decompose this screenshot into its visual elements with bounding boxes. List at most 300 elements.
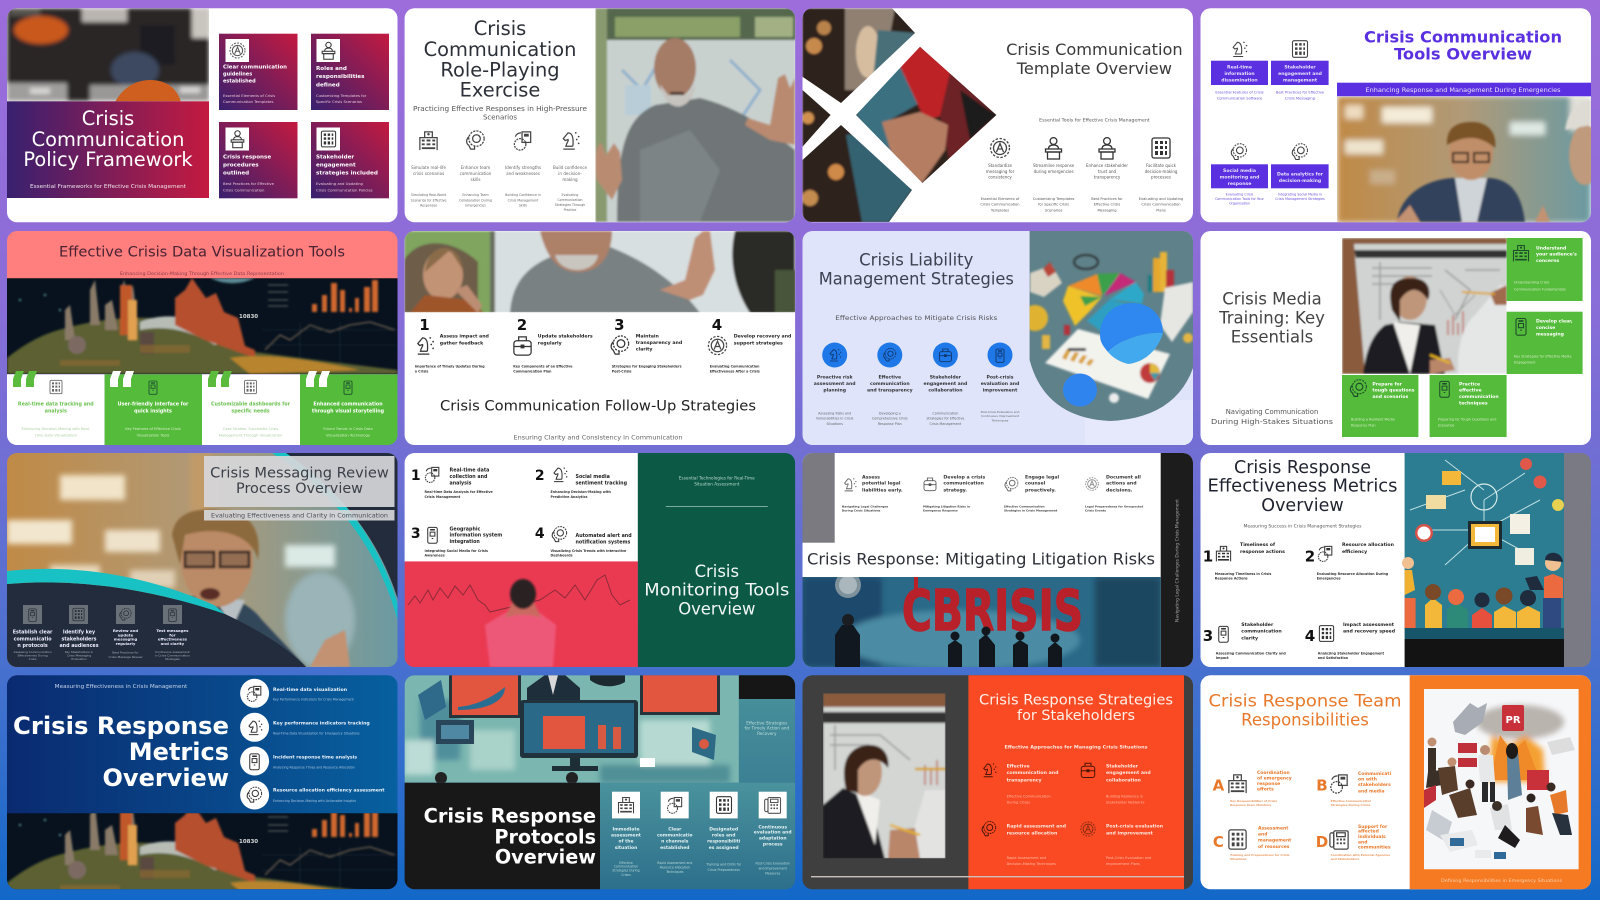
item 2: Enhancing Team <box>462 193 489 197</box>
column: real-time data tracking <box>7 371 105 445</box>
protocol 2: Techniques <box>665 870 684 874</box>
tool 2 <box>535 467 628 499</box>
tool 1: Real-time Data Analysis for Effective <box>424 490 493 494</box>
step 2 <box>513 316 593 374</box>
strategy 4: Post-Crisis Evaluation and <box>981 410 1020 414</box>
tool 4 <box>535 526 632 558</box>
metric 1: Timeliness of <box>1240 542 1276 548</box>
action 1: potential legal <box>862 481 901 487</box>
card: Prepare for tough questions: Building a Resilient Media <box>1351 417 1395 421</box>
column: user-friendly interface: User-friendly interface for <box>118 401 189 407</box>
strategy 1 <box>814 342 856 426</box>
item 1: Simulating Real-World <box>411 193 446 197</box>
step 2: regularly <box>538 340 562 346</box>
item 4: in decision- <box>558 171 582 176</box>
action 4: actions and <box>1106 481 1137 487</box>
tool: Social media monitoring and response: monitoring and <box>1220 175 1259 181</box>
column: enhanced communication: Future Trends in Crisis Data <box>323 427 373 431</box>
item 2: communication <box>460 171 492 176</box>
action 1: Assess <box>862 475 880 481</box>
column: user-friendly interface <box>105 371 202 445</box>
action 1 <box>842 475 903 512</box>
panel: Crisis Communication Role-Playing Exercise <box>404 8 796 223</box>
tool 2: 2 <box>535 468 545 484</box>
heading: Crisis Media <box>1222 289 1322 308</box>
step: review messaging: regularly <box>116 641 136 646</box>
heading box <box>204 456 394 507</box>
responsibility B: Communicati <box>1358 771 1392 777</box>
action 1: During Crisis Situations <box>842 508 881 512</box>
item 2: Streamline response <box>1033 163 1075 168</box>
protocol 2: Resource Allocation <box>660 865 690 869</box>
tool: Real-time information dissemination: dissemination <box>1221 78 1258 84</box>
item 2 <box>459 131 492 208</box>
card: Practice effective communication: techniques <box>1459 400 1488 406</box>
panel: Effective Crisis Data Visualization Tools <box>7 231 398 445</box>
column: customizable dashboards: Case Studies: Successful Crisis <box>223 427 278 431</box>
strategy 3: collaboration <box>928 387 962 393</box>
card: Understand your audience <box>1507 238 1583 301</box>
subtitle box <box>204 510 394 520</box>
step 4: Effectiveness After a Crisis <box>710 370 760 374</box>
step: identify stakeholders: and audiences <box>59 643 99 649</box>
PR sign: PR <box>1505 715 1521 726</box>
protocol 3: es assigned <box>709 845 739 851</box>
heading <box>1007 43 1182 78</box>
responsibility D: Support for <box>1358 824 1388 830</box>
tool: Real-time information dissemination <box>1211 42 1268 100</box>
column: real-time data tracking: Time Data Visualization <box>34 434 77 438</box>
heading <box>1208 692 1402 730</box>
card: Stakeholder engagement strategies: Stakeholder <box>316 154 354 160</box>
panel: Crisis Response Metrics Overview <box>7 675 398 899</box>
step 1: gather feedback <box>440 340 484 346</box>
tool 2: sentiment tracking <box>576 480 628 486</box>
action 4: Legal Preparedness for Unexpected <box>1085 504 1143 508</box>
action 3: Effective Communication <box>1004 504 1045 508</box>
strategy 2: Developing a <box>879 411 901 415</box>
decorative blue lens <box>1100 303 1163 352</box>
responsibility B: and media <box>1358 788 1385 794</box>
tool 4: notification systems <box>576 540 630 546</box>
step: review messaging: Review and <box>113 628 138 633</box>
step: communication protocols: communicatio <box>14 636 52 642</box>
strategy 2: Response Plan <box>878 422 902 426</box>
metric 3: 3 <box>1203 627 1213 645</box>
strategy 3: Strategies for Effective <box>926 416 964 420</box>
item 3: Skills <box>519 204 527 208</box>
tool 3: Integrating Social Media for Crisis <box>424 549 488 553</box>
item 4: Build confidence <box>553 165 587 170</box>
card: Roles and responsibilities: Customizing Templates for <box>316 93 367 98</box>
metric 2 <box>1305 542 1394 581</box>
action 3: Engage legal <box>1025 475 1060 481</box>
subtitle: Practicing Effective Responses in High-Pressure <box>413 105 587 113</box>
tool 4: Visualizing Crisis Trends with Interactive <box>550 549 627 553</box>
protocol 3: Crisis Preparedness <box>708 868 740 872</box>
heading: Exercise <box>460 79 540 102</box>
tool 1: analysis <box>450 480 472 486</box>
subtitle <box>1211 408 1334 426</box>
step 3: Strategies for Engaging Stakeholders <box>612 364 682 368</box>
strategy 3: engagement and <box>923 381 967 387</box>
tool: Social media monitoring and response: Social media <box>1223 168 1256 174</box>
protocol cards <box>600 783 796 890</box>
item 3 <box>1086 138 1128 212</box>
item 1: Crisis Communication <box>980 203 1020 207</box>
column: real-time data tracking: Real-time data tracking and <box>18 401 94 407</box>
tool 2: Social media <box>576 474 610 480</box>
card: Clear communication guidelines: established <box>223 78 256 84</box>
action 2: Emergency Response <box>923 508 958 512</box>
protocol 3: Training and Drills for <box>705 862 742 866</box>
strategy 2: Stakeholder <box>1106 764 1139 770</box>
card: Crisis response procedures: procedures <box>223 162 259 168</box>
heading: Essentials <box>1231 327 1313 346</box>
responsibility D <box>1316 824 1391 861</box>
item 2: Collaboration During <box>459 198 492 202</box>
card: Stakeholder engagement strategies: Crisis Communication Policies <box>316 188 373 192</box>
metric 4: and recovery speed <box>1343 629 1395 635</box>
side note: Recovery <box>757 731 777 736</box>
heading <box>979 692 1173 724</box>
card: Understand your audience: Understand <box>1536 245 1566 251</box>
item 4: Facilitate quick <box>1146 163 1177 168</box>
item 4: Practice <box>564 208 576 212</box>
metric 3: Assessing Communication Clarity and <box>1216 651 1286 655</box>
tool 2: Predictive Analytics <box>550 495 588 499</box>
metric 1: Response Actions <box>1215 577 1248 581</box>
item 1: Templates <box>990 208 1009 212</box>
step: communication protocols: Effectiveness During <box>18 654 48 658</box>
image: data terrain <box>7 803 398 899</box>
strategy 4: Post-crisis <box>987 375 1014 381</box>
step 4 <box>708 316 791 374</box>
metric row 1 <box>240 679 355 708</box>
metric 1 <box>1203 542 1285 581</box>
card: Crisis response procedures: Crisis response <box>223 154 271 160</box>
step: identify stakeholders: Crisis Messaging <box>67 654 91 658</box>
subtitle: Ensuring Clarity and Consistency in Communication <box>514 435 683 441</box>
metric 1: 1 <box>1203 547 1213 565</box>
item 1: messaging for <box>986 169 1015 174</box>
heading: Crisis Communication <box>1006 40 1183 59</box>
PR sign <box>1502 705 1524 731</box>
metric 2: 2 <box>1305 547 1315 565</box>
tool 3: Awareness <box>424 554 445 558</box>
strategy 2 <box>867 342 913 426</box>
strategy 3: Decision-Making Techniques <box>1007 862 1056 866</box>
title panel <box>7 101 209 198</box>
protocol 2 <box>657 792 693 874</box>
photo: jacket in diamond mosaic <box>802 8 1002 223</box>
protocol 1: Immediate <box>612 827 640 833</box>
responsibility C: of resources <box>1258 844 1290 850</box>
protocol 3: Designated <box>709 827 738 833</box>
card: Practice effective communication: Scenarios <box>1438 423 1455 427</box>
photo: woman at whiteboard <box>823 693 946 859</box>
heading <box>13 712 229 792</box>
tool 3: Geographic <box>450 526 481 532</box>
strategy 2: Building Resilience in <box>1106 794 1143 798</box>
column: enhanced communication: Visualization Technology <box>326 434 371 438</box>
card: Roles and responsibilities <box>311 34 389 110</box>
step 4: Develop recovery and <box>734 334 791 340</box>
step 3 <box>611 316 682 374</box>
panel: Crisis Communication Policy Framework <box>7 8 398 223</box>
card: Develop clear messaging: Engagement <box>1514 360 1536 364</box>
metric row 4 <box>240 780 385 810</box>
card: Clear communication guidelines: guidelines <box>223 72 252 78</box>
panel: Crisis Response Strategies for Stakeholders <box>802 675 1194 890</box>
protocol 4: and Improvement <box>758 867 788 871</box>
action 3 <box>1004 475 1060 512</box>
metric row 4: Resource allocation efficiency assessment <box>273 788 385 794</box>
step 2: Update stakeholders <box>538 334 593 340</box>
responsibility D: Coordination with External Agencies <box>1331 853 1390 857</box>
heading: Management Strategies <box>819 269 1014 288</box>
protocol 1: Strategies During <box>612 869 640 873</box>
heading: Template Overview <box>1016 59 1172 78</box>
heading: Crisis Communication <box>1364 27 1562 46</box>
card: Clear communication guidelines: Essential Elements of Crisis <box>223 93 275 98</box>
column: real-time data tracking: Enhancing Decision-Making with Real- <box>22 427 91 431</box>
step: review messaging: update <box>118 632 134 637</box>
card: Develop clear messaging <box>1507 312 1583 374</box>
step 3: clarity <box>636 346 652 352</box>
strategy 4: and improvement <box>1106 830 1154 836</box>
panel: Crisis Response Mitigating Litigation Risks <box>802 453 1194 670</box>
tool 4: Dashboards <box>550 554 573 558</box>
tool 1: Crisis Management <box>424 495 461 499</box>
step: test messages: Strategies <box>165 657 180 661</box>
tool: Data analytics for decision-making <box>1271 144 1329 201</box>
strategy 3: Rapid assessment and <box>1007 823 1066 829</box>
item 4: making <box>562 177 578 182</box>
protocol 1: assessment <box>611 833 642 839</box>
card: Crisis response procedures <box>219 122 298 198</box>
card: Practice effective communication: communication <box>1459 394 1499 400</box>
tool 4: Automated alert and <box>576 533 632 539</box>
step: communication protocols: Crisis <box>29 657 37 661</box>
item 3: Building Confidence in <box>505 193 541 197</box>
metric row 1: Real-time data visualization <box>273 687 347 693</box>
strategy 4: Improvement Plans <box>1106 862 1140 866</box>
tool: Stakeholder engagement and management: management <box>1283 78 1318 84</box>
step 1: a Crisis <box>415 370 428 374</box>
responsibility A: A <box>1213 777 1225 795</box>
protocol 4: Measures <box>765 872 781 876</box>
protocol 3: roles and <box>712 833 736 839</box>
strategy 3: Stakeholder <box>930 375 962 381</box>
card: Prepare for tough questions <box>1342 375 1418 437</box>
protocol 2: communicatio <box>657 833 693 839</box>
card: Understand your audience: Communication Fundamentals <box>1514 287 1566 291</box>
tool: Data analytics for decision-making: Data analytics for <box>1277 171 1324 177</box>
subtitle: During High-Stakes Situations <box>1211 418 1334 426</box>
column: customizable dashboards: Customizable dashboards for <box>211 401 291 407</box>
strategy 4: evaluation and <box>981 381 1019 387</box>
image: data terrain <box>7 278 398 374</box>
column: customizable dashboards: specific needs <box>231 408 270 414</box>
responsibility B: B <box>1316 777 1328 795</box>
action 2: Develop a crisis <box>943 475 985 481</box>
column: customizable dashboards: Management Through Visualization <box>219 434 282 438</box>
card: Prepare for tough questions: tough questions <box>1372 388 1415 394</box>
step: identify stakeholders: Key Stakeholders in <box>65 650 93 654</box>
card: Practice effective communication: Practice <box>1459 381 1480 387</box>
item 4: Evaluating and Updating <box>1139 197 1183 201</box>
card: Crisis response procedures: Best Practices for Effective <box>223 181 275 186</box>
tool 1: collection and <box>450 474 488 480</box>
strategy 3 <box>923 342 967 426</box>
tool 1: 1 <box>411 468 421 484</box>
heading: Metrics <box>129 738 229 766</box>
item 1 <box>980 138 1020 212</box>
item 2: Customizing Templates <box>1033 197 1075 201</box>
sidebar with heading: Situation Assessment <box>694 481 740 486</box>
step: test messages: effectiveness <box>158 637 188 642</box>
metric row 3 <box>240 746 357 776</box>
card: Develop clear messaging: Develop clear, <box>1536 319 1573 325</box>
photo: heated discussion <box>404 231 796 313</box>
action 1: liabilities early. <box>862 487 903 493</box>
tool: Stakeholder engagement and management: Stakeholder <box>1284 64 1316 70</box>
strategy 2: Stakeholder Networks <box>1106 801 1145 805</box>
strategy 3 <box>982 822 1066 866</box>
metric 4: 4 <box>1305 627 1315 645</box>
column: enhanced communication: through visual storytelling <box>312 408 385 414</box>
panel: Crisis Communication Template Overview <box>802 8 1194 223</box>
tool: Real-time information dissemination: Real-time <box>1227 64 1252 70</box>
title panel: Essential Frameworks for Effective Crisis Management <box>30 184 186 190</box>
metric 3: Impact <box>1216 656 1229 660</box>
item 1: Standardize <box>988 163 1012 168</box>
responsibility C: Training and Preparedness for Crisis <box>1230 853 1290 857</box>
protocol 1: of the <box>618 839 634 845</box>
strategy 4: Post-crisis evaluation <box>1106 823 1163 829</box>
step: test messages <box>155 605 191 661</box>
step 3: Post-Crisis <box>612 370 632 374</box>
item 1 <box>411 132 447 208</box>
step 1: Assess impact and <box>440 334 489 340</box>
action 1: Navigating Legal Challenges <box>842 504 889 508</box>
strategy 3: Communication <box>932 411 958 415</box>
strategy 1: transparency <box>1007 777 1042 783</box>
responsibility C: and <box>1258 832 1267 838</box>
card: Roles and responsibilities: defined <box>316 82 340 88</box>
metric 1: Measuring Timeliness in Crisis <box>1215 572 1271 576</box>
item 4: Crisis Communication <box>1141 203 1181 207</box>
heading: Crisis Response: Mitigating Litigation Risks <box>807 549 1155 568</box>
responsibility D: affected <box>1358 828 1379 834</box>
card: Develop clear messaging: Key Strategies for Effective Media <box>1514 354 1571 358</box>
card: Stakeholder engagement strategies: strategies included <box>316 170 378 176</box>
decorative navy curve <box>285 453 398 600</box>
heading: Tools Overview <box>1394 44 1532 63</box>
responsibility C: C <box>1213 833 1224 851</box>
protocol 2: Rapid Assessment and <box>657 861 692 865</box>
photo: man in glasses <box>1337 96 1600 223</box>
item 1: consistency <box>988 174 1012 180</box>
metric 3: Stakeholder <box>1241 622 1274 628</box>
item 1: Scenarios for Effective <box>411 198 447 202</box>
responsibility D: and Stakeholders <box>1331 857 1359 861</box>
heading: Crisis Communication Follow-Up Strategies <box>440 398 756 414</box>
card: Stakeholder engagement strategies: Evaluating and Updating <box>316 181 364 186</box>
step 2: 2 <box>517 316 527 334</box>
responsibility A: Coordination <box>1257 770 1290 776</box>
action 2 <box>923 475 985 512</box>
heading: Effectiveness Metrics <box>1208 476 1398 496</box>
subtitle: Essential Tools for Effective Crisis Management <box>1039 118 1150 124</box>
step: communication protocols: n protocols <box>17 643 48 649</box>
item 2: skills <box>470 177 481 182</box>
item 4 <box>553 132 587 212</box>
illustration: PR crisis scene <box>1424 689 1579 870</box>
item 2: for Specific Crisis <box>1038 203 1069 207</box>
card: Develop clear messaging: messaging <box>1536 331 1564 337</box>
subtitle box: Evaluating Effectiveness and Clarity in Communication <box>211 513 388 519</box>
tool 3: 3 <box>411 526 421 542</box>
heading: Communication <box>424 38 576 61</box>
card: Develop clear messaging: concise <box>1536 325 1555 331</box>
item 3: and weaknesses <box>506 171 540 176</box>
side note <box>744 720 789 736</box>
heading box: Crisis Messaging Review <box>210 466 389 482</box>
title panel: Policy Framework <box>23 148 193 171</box>
metric 2: Resource allocation <box>1342 542 1394 548</box>
card: Stakeholder engagement strategies <box>311 122 389 198</box>
strategy 1: communication and <box>1007 770 1058 776</box>
tool: Data analytics for decision-making: decision-making <box>1279 178 1321 184</box>
metric row 1: Key Performance Indicators for Crisis Management <box>273 698 355 702</box>
action 2: Mitigating Litigation Risks in <box>923 504 970 508</box>
item 2: Emergencies <box>465 204 486 208</box>
heading <box>1364 30 1561 60</box>
action 4: Crisis Events <box>1085 508 1106 512</box>
protocol 1: situation <box>615 845 637 851</box>
responsibility A: Response Team Members <box>1230 803 1272 807</box>
step: test messages: Continuous Assessment <box>155 650 191 654</box>
item 1: crisis scenarios <box>413 171 444 176</box>
responsibility D: communities <box>1358 844 1391 850</box>
photo: woman at whiteboard <box>1342 238 1507 374</box>
protocol 1: Communication <box>614 865 638 869</box>
step 4: support strategies <box>734 340 783 346</box>
tool 4: 4 <box>535 526 545 542</box>
step 3: transparency and <box>636 340 682 346</box>
item 4 <box>1139 138 1183 212</box>
responsibility D: D <box>1316 833 1328 851</box>
subtitle: Effective Approaches for Managing Crisis Situations <box>1004 744 1148 750</box>
strategy 4 <box>981 342 1020 422</box>
step: communication protocols: Establish clear <box>13 630 53 636</box>
item 3: trust and <box>1098 169 1117 174</box>
metric row 3: Analyzing Response Times and Resource Allocation <box>273 765 355 769</box>
column: customizable dashboards <box>202 371 300 445</box>
panel: Crisis Liability Management Strategies <box>802 231 1194 446</box>
action 2: communication <box>943 481 984 487</box>
metric 4: Impact assessment <box>1343 622 1395 628</box>
heading: Crisis <box>474 17 526 40</box>
panel: Crisis Response Protocols Overview <box>404 675 796 890</box>
step: test messages: for <box>169 632 176 637</box>
side note: Effective Strategies <box>746 720 787 725</box>
heading panel: Protocols <box>494 825 596 848</box>
action 4: Document all <box>1106 475 1141 481</box>
metric row 3: Incident response time analysis <box>273 754 357 760</box>
